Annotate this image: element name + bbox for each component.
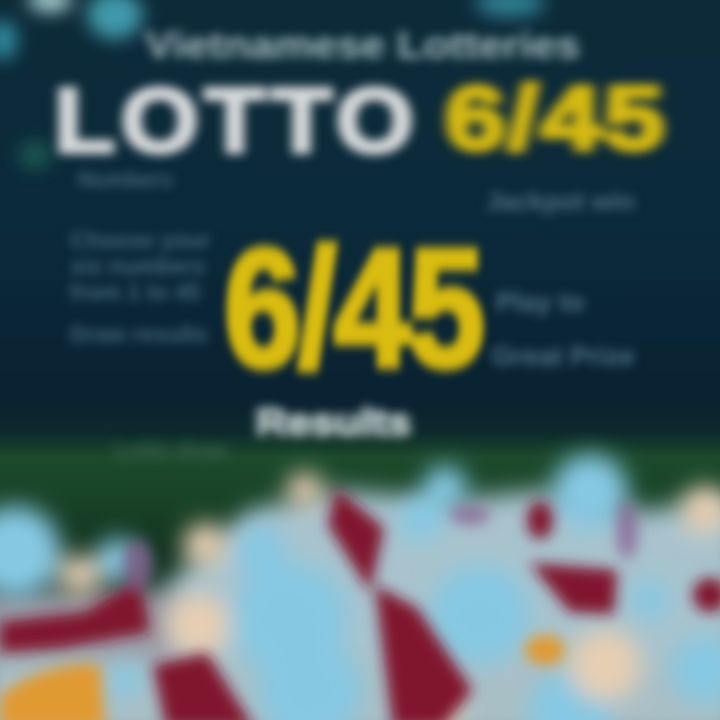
right text: line one: Play to — [496, 287, 585, 317]
purple highlights — [123, 501, 638, 590]
orange ball — [0, 635, 565, 720]
left text: description: Choose your — [70, 227, 211, 253]
big number 6/45: 6/45 — [224, 214, 482, 402]
right text: upper: Jackpot win — [486, 186, 635, 216]
right text: lower — [488, 287, 637, 371]
left text: description: from 1 to 45 — [70, 279, 200, 305]
title: LOTTO: LOTTO — [54, 70, 419, 172]
faint field text: Lotto draw — [115, 438, 227, 463]
ball pile base colour — [0, 490, 720, 720]
right text: line two: Great Prize — [492, 341, 635, 371]
light blue balls — [0, 454, 720, 720]
cream balls — [60, 472, 720, 720]
left text: note: Draw results — [70, 321, 208, 347]
left text: heading: Numbers — [78, 167, 173, 192]
title: 6/45: 6/45 — [445, 69, 667, 169]
left text column — [67, 167, 212, 347]
caption under number: Results — [256, 402, 411, 444]
left text: description: six numbers — [70, 253, 206, 279]
left text: description — [67, 227, 212, 305]
header line: Vietnamese Lotteries — [145, 25, 580, 67]
maroon ball stripes — [0, 488, 720, 720]
